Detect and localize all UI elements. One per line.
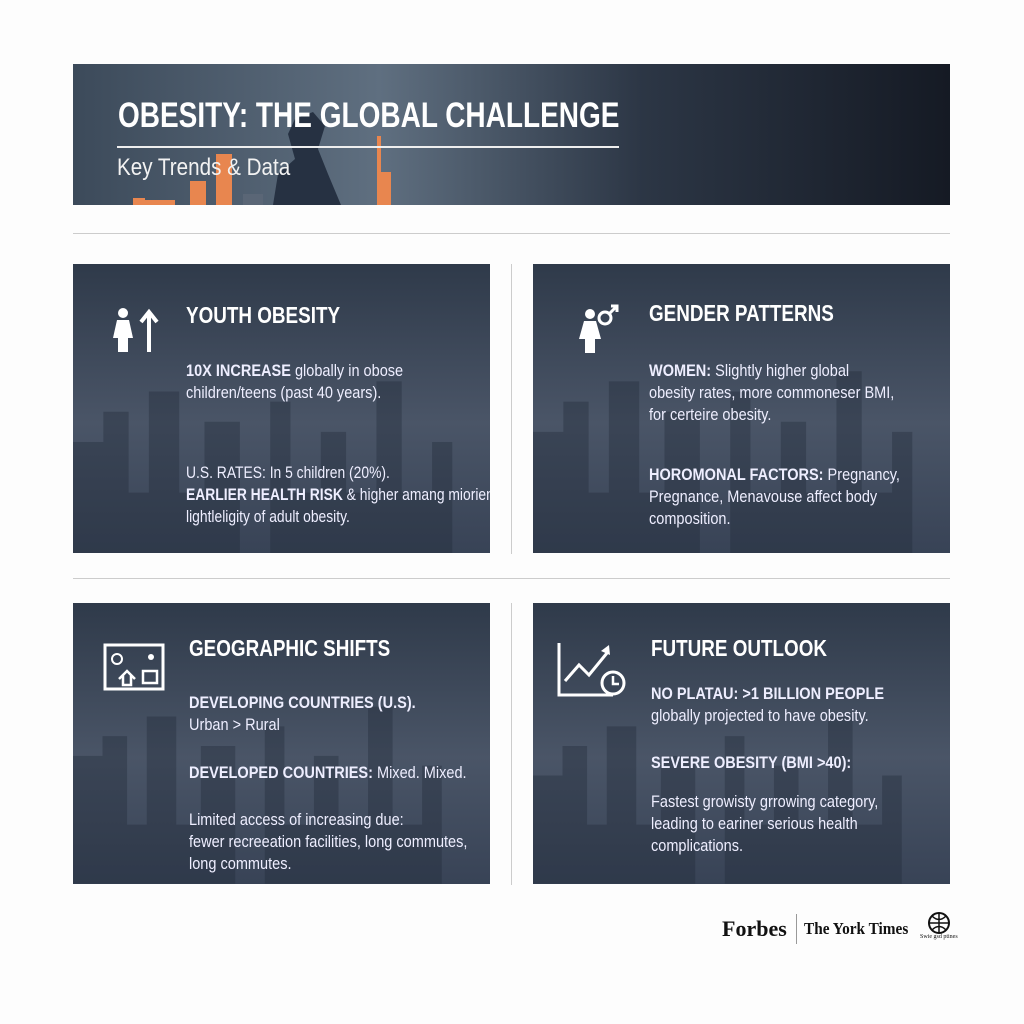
panel: gender patterns: HOROMONAL FACTORS: Pregnancy, xyxy=(649,466,900,484)
panel: gender patterns xyxy=(533,264,950,553)
text xyxy=(651,685,884,725)
panel: youth obesity: U.S. RATES: In 5 children (20%). xyxy=(186,464,390,482)
logos: The York Times xyxy=(804,919,908,938)
icon: child with arrow xyxy=(113,308,158,352)
text xyxy=(649,362,894,424)
panel: future outlook: leading to eariner serious health xyxy=(651,815,858,833)
panel: geographic shifts: long commutes. xyxy=(189,855,291,873)
logos: Forbes xyxy=(722,916,787,941)
panel: youth obesity: EARLIER HEALTH RISK & higher amang miorien xyxy=(186,486,490,504)
text xyxy=(189,694,416,734)
text: NO PLATAU: >1 BILLION PEOPLE xyxy=(651,685,884,703)
text: DEVELOPING COUNTRIES (U.S). xyxy=(189,694,416,712)
panel: future outlook xyxy=(533,603,950,884)
panel: gender patterns: Pregnance, Menavouse affect body xyxy=(649,488,877,506)
logos xyxy=(722,912,958,944)
panel: geographic shifts: DEVELOPED COUNTRIES: Mixed. Mixed. xyxy=(189,764,467,782)
header banner xyxy=(73,64,950,205)
heading: FUTURE OUTLOOK xyxy=(651,635,827,661)
icon: trend chart with clock xyxy=(558,643,626,696)
icon: map xyxy=(104,644,164,690)
title: OBESITY: THE GLOBAL CHALLENGE xyxy=(118,96,619,135)
panel: future outlook: SEVERE OBESITY (BMI >40): xyxy=(651,754,851,772)
panel: future outlook: complications. xyxy=(651,837,743,855)
text: 10X INCREASE globally in obose xyxy=(186,362,403,380)
subtitle: Key Trends & Data xyxy=(117,154,290,181)
logos: Swie gsd ptines xyxy=(920,934,958,940)
heading: YOUTH OBESITY xyxy=(186,302,340,328)
panel: geographic shifts xyxy=(73,603,490,884)
text: for certeire obesity. xyxy=(649,406,771,424)
text xyxy=(186,362,403,402)
text: WOMEN: Slightly higher global xyxy=(649,362,849,380)
text: children/teens (past 40 years). xyxy=(186,384,381,402)
panel: geographic shifts: fewer recreeation facilities, long commutes, xyxy=(189,833,467,851)
panel: geographic shifts: Limited access of increasing due: xyxy=(189,811,404,829)
heading: GENDER PATTERNS xyxy=(649,300,834,326)
panel: youth obesity: lightleligity of adult obesity. xyxy=(186,508,350,526)
text: Urban > Rural xyxy=(189,716,280,734)
text: obesity rates, more commoneser BMI, xyxy=(649,384,894,402)
panel: youth obesity xyxy=(73,264,490,553)
panel: gender patterns: composition. xyxy=(649,510,731,528)
panel: future outlook: Fastest growisty grrowing category, xyxy=(651,793,878,811)
icon: gender xyxy=(579,304,618,353)
heading: GEOGRAPHIC SHIFTS xyxy=(189,635,390,661)
text: globally projected to have obesity. xyxy=(651,707,869,725)
